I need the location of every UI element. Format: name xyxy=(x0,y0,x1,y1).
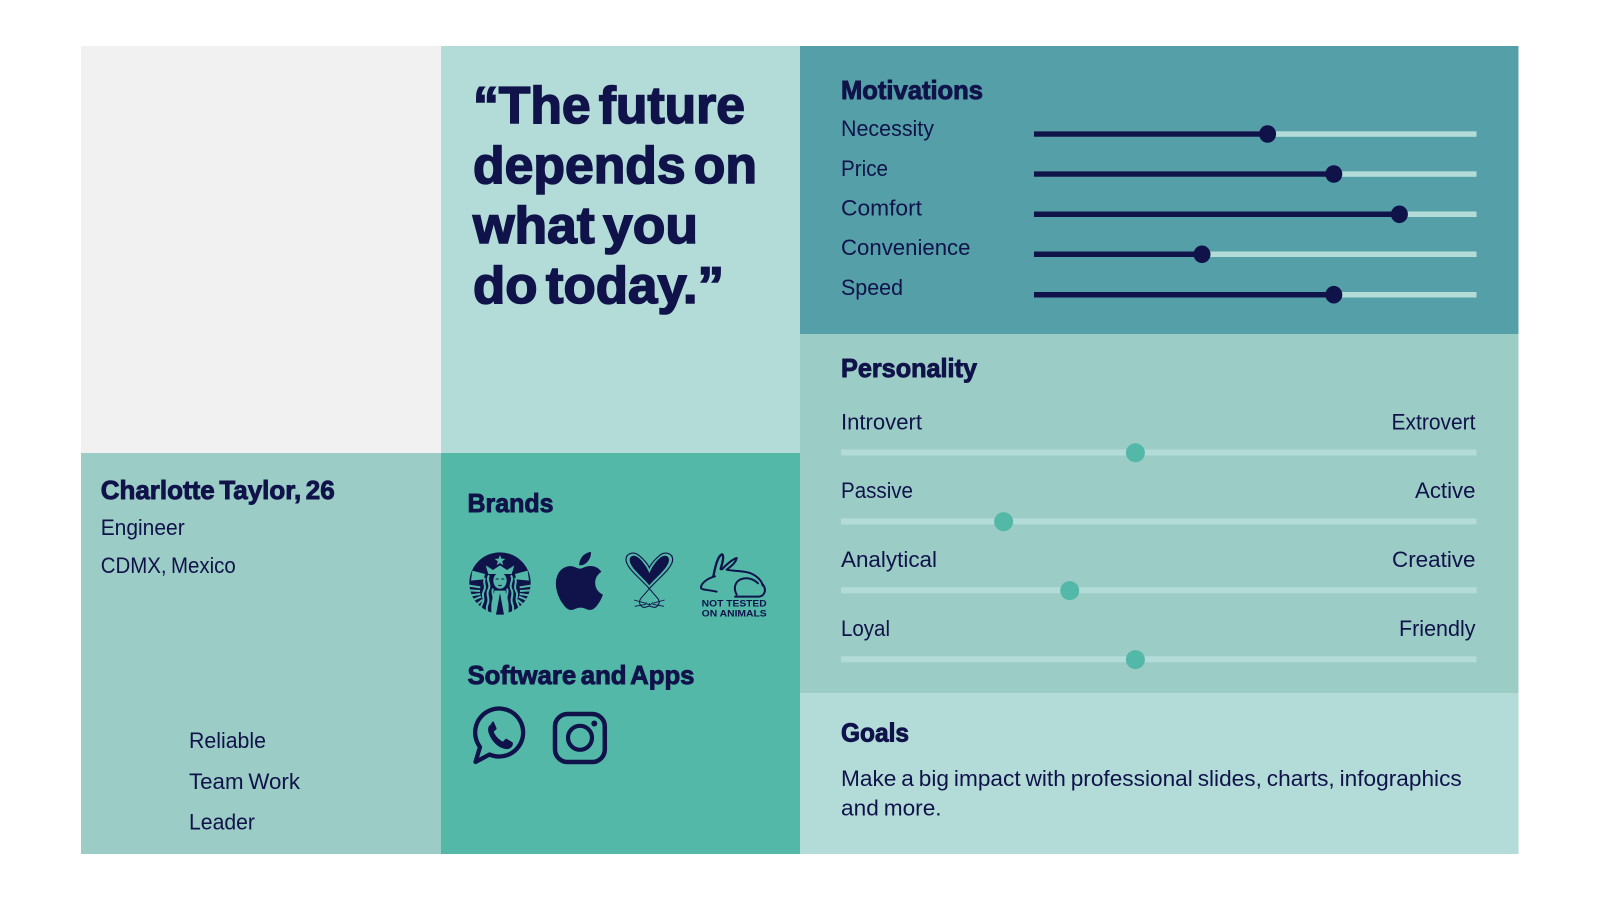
goals text: Make a big impact with professional slides, charts, infographics xyxy=(841,766,1462,791)
scale: analytical to creative: Analytical xyxy=(841,547,937,572)
panel: personality xyxy=(800,334,1518,693)
brands heading: Brands xyxy=(468,488,554,518)
quote text xyxy=(472,77,757,315)
software and apps heading: Software and Apps xyxy=(468,660,694,690)
slider: convenience: Convenience xyxy=(841,235,970,260)
motivations heading: Motivations xyxy=(841,75,983,105)
scale: loyal to friendly: Friendly xyxy=(1399,616,1476,641)
occupation and location: CDMX, Mexico xyxy=(101,553,236,578)
scale: introvert to extrovert xyxy=(841,410,1476,462)
icon: leaping bunny heart logo xyxy=(626,553,673,607)
traits list: Team Work xyxy=(189,769,301,794)
traits list: Leader xyxy=(189,810,255,834)
quote text: depends on xyxy=(473,137,757,195)
scale: analytical to creative xyxy=(841,547,1476,600)
goals text xyxy=(841,766,1462,821)
panel: photo placeholder xyxy=(81,46,441,453)
personality heading: Personality xyxy=(841,353,978,383)
scale: analytical to creative: Creative xyxy=(1392,547,1476,572)
occupation and location xyxy=(101,515,236,578)
scale: passive to active: Passive xyxy=(841,478,913,503)
traits list xyxy=(189,728,301,834)
slider: comfort: Comfort xyxy=(841,196,922,221)
slider: speed: Speed xyxy=(841,275,903,300)
panel: motivations xyxy=(800,46,1518,334)
scale: introvert to extrovert: Extrovert xyxy=(1392,410,1476,434)
slider: price: Price xyxy=(841,156,888,181)
slider: necessity xyxy=(841,116,1476,143)
quote text: do today.” xyxy=(473,257,724,315)
goals heading: Goals xyxy=(841,717,909,747)
slider: convenience xyxy=(841,235,1476,263)
occupation and location: Engineer xyxy=(101,515,185,540)
slider: speed xyxy=(841,275,1476,304)
quote text: what you xyxy=(472,197,698,255)
slider: price xyxy=(841,156,1476,183)
icon: apple logo xyxy=(556,552,603,610)
slider: comfort xyxy=(841,196,1476,223)
panel: quote xyxy=(441,46,800,453)
icon: starbucks-style siren logo xyxy=(469,552,531,615)
scale: introvert to extrovert: Introvert xyxy=(841,410,922,434)
icon: whatsapp xyxy=(475,709,523,762)
goals text: and more. xyxy=(841,796,942,821)
icon: not tested on animals logo: NOT TESTED xyxy=(702,598,767,609)
quote text: “The future xyxy=(473,77,745,135)
scale: passive to active: Active xyxy=(1415,478,1476,503)
name heading: Charlotte Taylor, 26 xyxy=(101,475,335,505)
scale: loyal to friendly xyxy=(841,616,1476,669)
slider: necessity: Necessity xyxy=(841,116,934,141)
icon: instagram xyxy=(555,714,605,762)
scale: loyal to friendly: Loyal xyxy=(841,616,890,641)
scale: passive to active xyxy=(841,478,1476,531)
panel: goals xyxy=(800,693,1518,854)
icon: not tested on animals logo: ON ANIMALS xyxy=(702,608,767,619)
traits list: Reliable xyxy=(189,728,266,753)
panel: brands and apps xyxy=(441,453,800,854)
icon: not tested on animals logo xyxy=(701,554,767,619)
panel: profile xyxy=(81,453,441,854)
